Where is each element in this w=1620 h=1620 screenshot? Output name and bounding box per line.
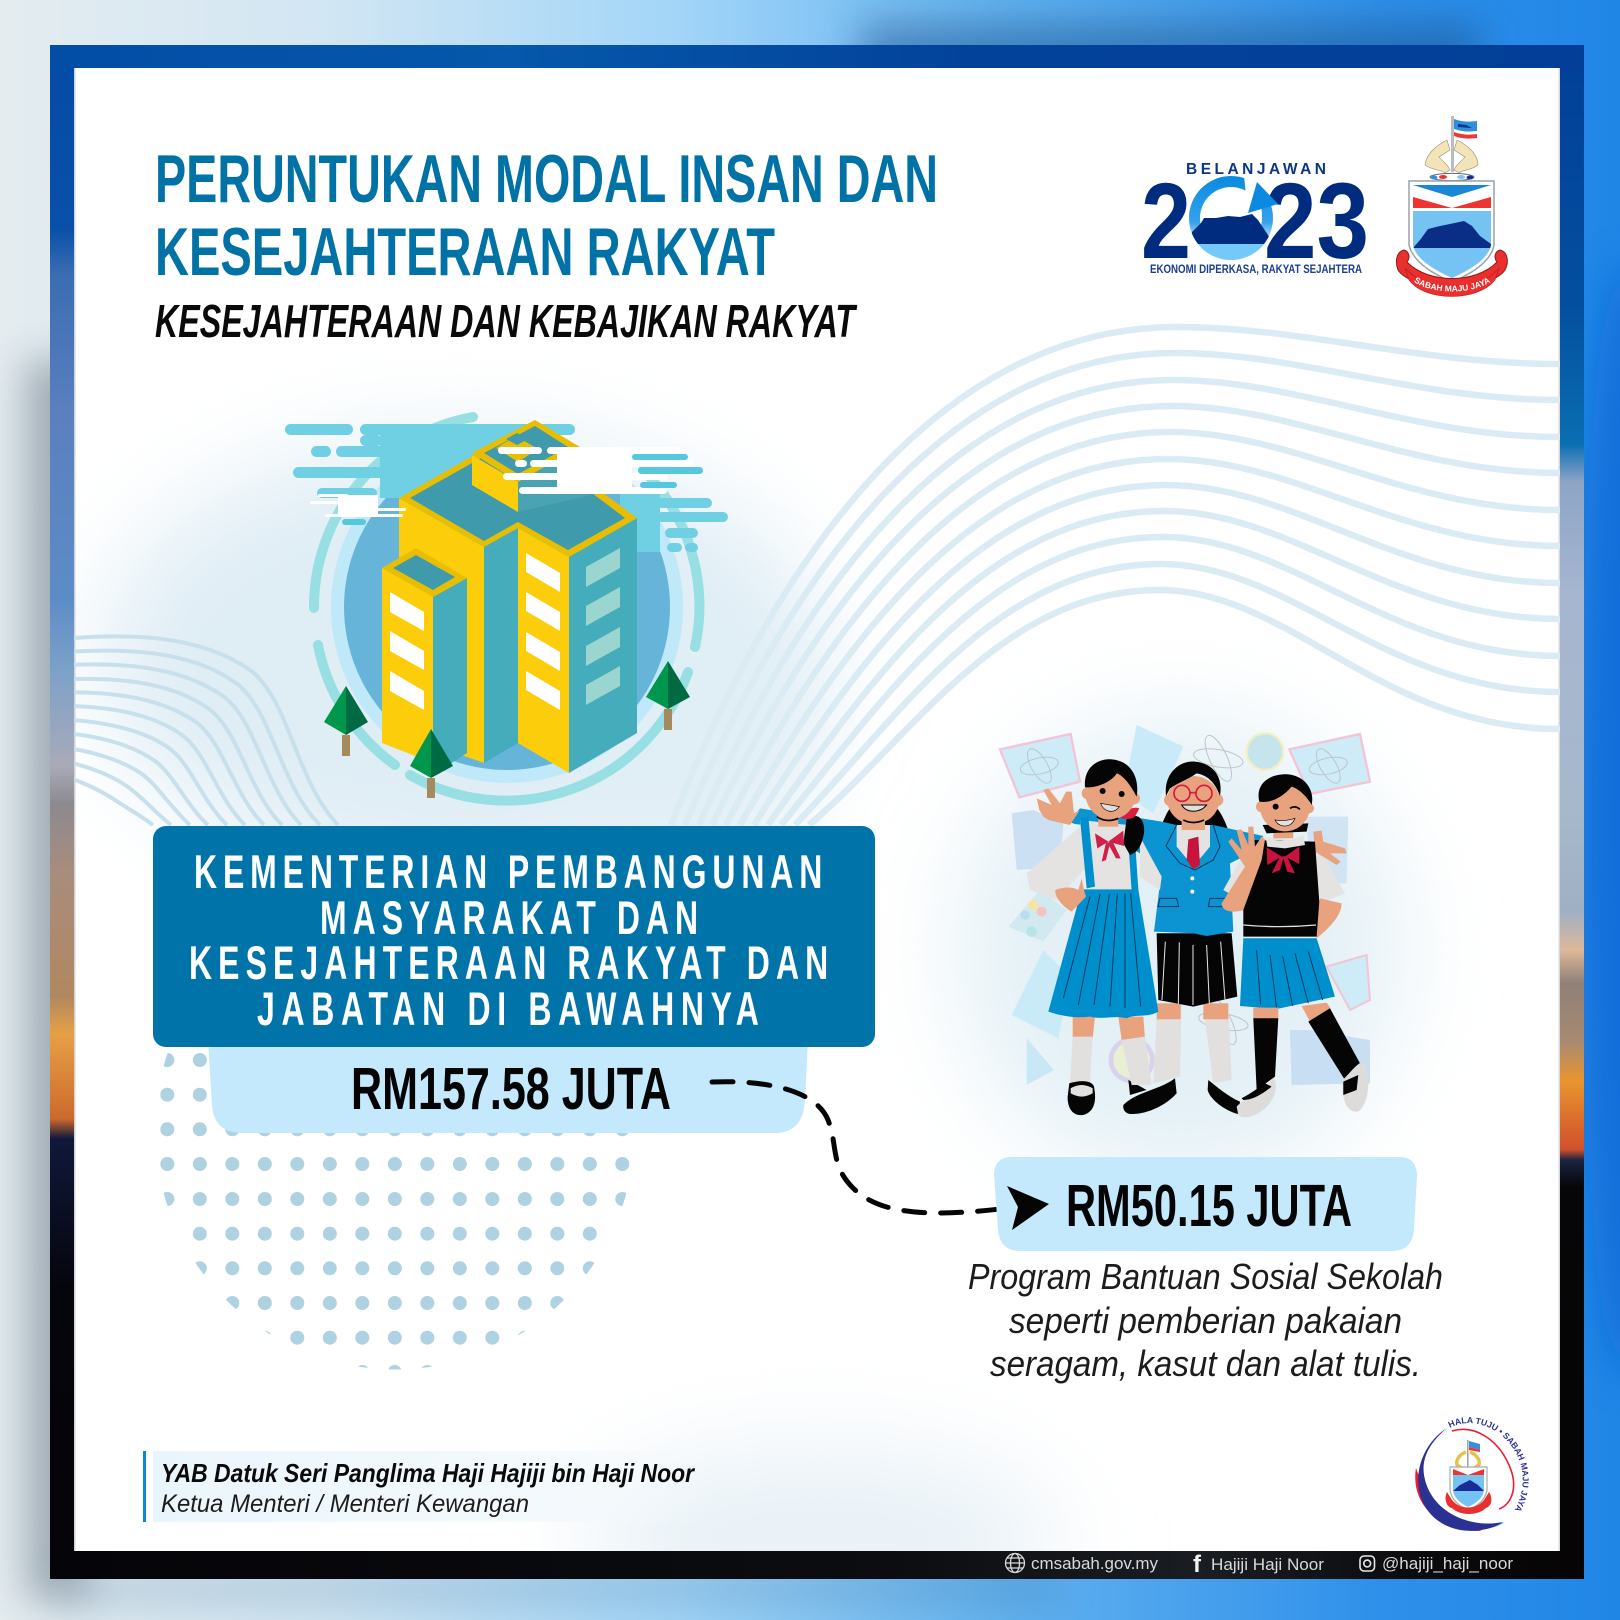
tree 1	[324, 686, 368, 756]
logo: Belanjawan 2023	[1141, 160, 1369, 281]
subtitle: KESEJAHTERAAN DAN KEBAJIKAN RAKYAT	[155, 295, 858, 347]
ministry heading box: KESEJAHTERAAN RAKYAT DAN	[189, 937, 828, 990]
illustration: isometric building	[285, 417, 728, 801]
amount tab: RM157.58 JUTA	[208, 1040, 808, 1133]
white clouds	[310, 447, 693, 517]
icon: facebook: f	[1193, 1551, 1202, 1578]
blue clouds	[285, 424, 728, 552]
ministry heading box: KEMENTERIAN PEMBANGUNAN	[194, 846, 822, 899]
icon: globe	[1006, 1554, 1024, 1572]
signature block: YAB Datuk Seri Panglima Haji Hajiji bin Haji Noor	[161, 1458, 696, 1488]
logo: Belanjawan 2023: 23	[1264, 160, 1369, 281]
small tower	[382, 548, 467, 775]
footer links: @hajiji_haji_noor	[1382, 1555, 1514, 1573]
program description: seperti pemberian pakaian	[1009, 1300, 1402, 1341]
logo: Belanjawan 2023: BELANJAWAN	[1186, 161, 1326, 178]
decorative waves: left	[50, 636, 338, 825]
icon: instagram	[1360, 1556, 1374, 1571]
faded school items backdrop	[1000, 725, 1370, 1085]
logo: Belanjawan 2023: 2	[1141, 160, 1191, 281]
footer links	[1006, 1551, 1514, 1578]
title	[155, 141, 938, 290]
program description	[968, 1256, 1443, 1384]
windows	[390, 553, 560, 710]
student: left	[1027, 759, 1162, 1115]
student: right	[1222, 774, 1369, 1117]
signature block	[143, 1451, 713, 1522]
logo: Sabah state crest	[1396, 116, 1508, 297]
title: PERUNTUKAN MODAL INSAN DAN	[155, 141, 938, 217]
logo: Hala Tuju Sabah Maju Jaya seal	[1415, 1417, 1529, 1531]
program description: Program Bantuan Sosial Sekolah	[968, 1256, 1443, 1297]
dashed arrow	[712, 1082, 1017, 1213]
logo: Sabah state crest: SABAH MAJU JAYA	[1414, 278, 1490, 292]
signature block: Ketua Menteri / Menteri Kewangan	[161, 1490, 529, 1518]
concentric circles	[314, 417, 699, 801]
logo: Hala Tuju Sabah Maju Jaya seal: HALA TUJU • SABAH MAJU JAYA	[1448, 1417, 1529, 1510]
logo: Belanjawan 2023: EKONOMI DIPERKASA, RAKYAT SEJAHTERA	[1150, 264, 1362, 276]
footer links: Hajiji Haji Noor	[1211, 1556, 1325, 1574]
program description: seragam, kasut dan alat tulis.	[990, 1343, 1421, 1384]
cloud streaks	[342, 454, 703, 525]
tree 2	[410, 729, 453, 798]
tall towers	[399, 420, 637, 773]
ministry heading box	[153, 826, 875, 1047]
amount tab: RM157.58 JUTA: RM157.58 JUTA	[351, 1056, 671, 1122]
ministry heading box: MASYARAKAT DAN	[320, 892, 698, 945]
icon: arrow head	[1007, 1186, 1049, 1230]
dot pattern	[160, 1053, 629, 1379]
amount box: RM50.15 JUTA	[994, 1157, 1417, 1251]
title: KESEJAHTERAAN RAKYAT	[155, 214, 775, 290]
student: middle	[1068, 762, 1263, 1114]
tree 3	[646, 661, 690, 730]
ministry heading box: JABATAN DI BAWAHNYA	[257, 983, 759, 1036]
amount box: RM50.15 JUTA: RM50.15 JUTA	[1066, 1173, 1352, 1239]
footer links: cmsabah.gov.my	[1031, 1555, 1159, 1573]
decorative waves: right	[671, 327, 1560, 825]
illustration: three students in school uniforms	[1000, 725, 1370, 1117]
